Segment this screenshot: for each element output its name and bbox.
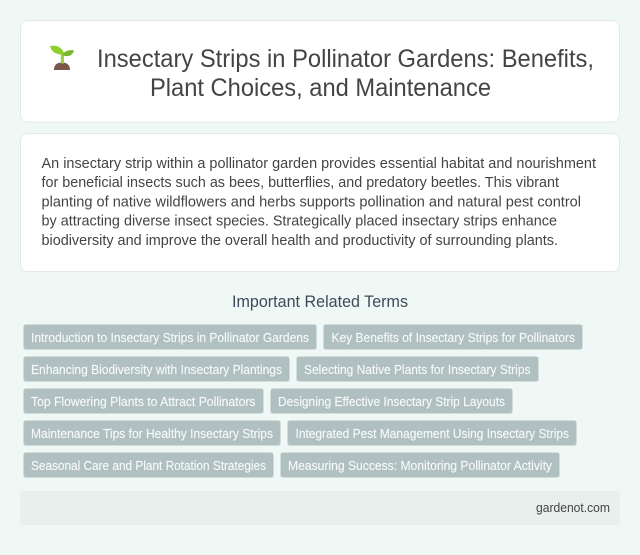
tag: measuring success	[280, 452, 560, 478]
panel: description	[20, 134, 620, 272]
tag: layouts: Designing Effective Insectary Strip Layouts	[278, 394, 505, 409]
tag: key benefits	[324, 324, 582, 350]
tag: biodiversity	[24, 356, 290, 382]
description text: for beneficial insects such as bees, butterflies, and predatory beetles. This vibrant	[42, 174, 560, 191]
footer	[20, 491, 620, 525]
tag: key benefits: Key Benefits of Insectary Strips for Pollinators	[332, 330, 575, 345]
tag: seasonal care	[24, 452, 274, 478]
tag: measuring success: Measuring Success: Monitoring Pollinator Activity	[288, 458, 553, 473]
tag: seasonal care: Seasonal Care and Plant Rotation Strategies	[31, 458, 266, 473]
tag: maintenance: Maintenance Tips for Healthy Insectary Strips	[31, 426, 273, 441]
tag: pest management	[288, 420, 576, 446]
tag: pest management: Integrated Pest Management Using Insectary Strips	[296, 426, 569, 441]
tag: maintenance	[24, 420, 280, 446]
footer source: gardenot.com	[536, 500, 610, 515]
title: Insectary Strips in Pollinator Gardens: Benefits,	[97, 45, 594, 73]
icon: sprout	[50, 46, 74, 70]
tag: layouts	[270, 388, 512, 414]
related terms tags	[24, 324, 582, 478]
description text	[42, 155, 597, 249]
tag: biodiversity: Enhancing Biodiversity with Insectary Plantings	[31, 362, 282, 377]
tag: native plants	[296, 356, 538, 382]
heading: related terms: Important Related Terms	[232, 293, 408, 311]
description text: planting of native wildflowers and herbs supports pollination and natural pest control	[42, 193, 581, 210]
title	[97, 45, 594, 102]
description text: by attracting diverse insect species. Strategically placed insectary strips enhance	[42, 213, 557, 230]
description text: biodiversity and improve the overall health and productivity of surrounding plants.	[42, 232, 558, 249]
tag: introduction: Introduction to Insectary Strips in Pollinator Gardens	[31, 330, 309, 345]
tag: introduction	[24, 324, 316, 350]
tag: native plants: Selecting Native Plants for Insectary Strips	[304, 362, 530, 377]
tag: flowering plants: Top Flowering Plants to Attract Pollinators	[31, 394, 256, 409]
title: Plant Choices, and Maintenance	[150, 74, 491, 102]
tag: flowering plants	[24, 388, 264, 414]
header panel	[20, 20, 620, 122]
description text: An insectary strip within a pollinator garden provides essential habitat and nourishment	[42, 155, 597, 172]
